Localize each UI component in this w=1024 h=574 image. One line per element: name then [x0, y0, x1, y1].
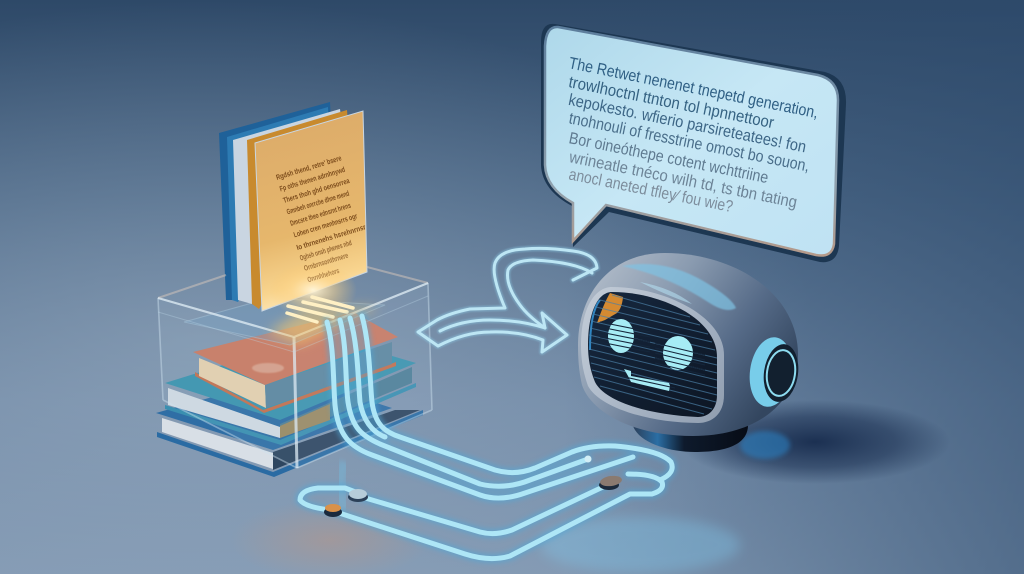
eye left — [608, 319, 634, 353]
bubble text: tnohnouli of fresstrine omost bo souon, — [567, 109, 811, 175]
robot shadow — [680, 400, 950, 484]
book stack — [156, 312, 423, 477]
glass box — [158, 267, 432, 468]
robot head — [578, 253, 798, 436]
page text: Lohen cren menhnsrrs ogr — [292, 211, 358, 239]
blue back cover — [219, 102, 332, 300]
page text: Ornbrnsonthrnere — [303, 251, 349, 273]
head highlight — [622, 264, 736, 310]
upright open book — [219, 102, 377, 318]
scan lines over face — [600, 322, 705, 388]
speech bubble — [541, 24, 846, 262]
scan lines — [589, 295, 717, 414]
orange page — [247, 110, 350, 309]
page text: Onrnhhehors — [306, 266, 340, 284]
bubble text: kepokesto. wfierio parsireteatees! fon — [567, 91, 808, 156]
cable end knob — [584, 456, 592, 462]
neon cables — [300, 316, 672, 559]
screen — [588, 292, 717, 417]
ear ring — [745, 334, 802, 410]
cable nodes — [324, 456, 623, 517]
cable floor reflection — [340, 462, 345, 510]
bubble depth — [541, 24, 846, 262]
robot base — [632, 418, 748, 452]
glass tray reflection — [184, 298, 385, 345]
bubble text: anocl aneted tfley∕ fou wie? — [567, 165, 734, 216]
bubble text: The Retwet nenenet tnepetd generation, — [567, 54, 820, 122]
page text: Rgdsh thend, retre' bsere — [275, 153, 343, 182]
side edges — [158, 283, 432, 468]
red book — [193, 312, 398, 413]
second blue cover — [227, 107, 330, 302]
silver node — [348, 489, 368, 502]
bubble text: Bor oineóthepe cotent wchttriine — [567, 129, 770, 187]
page glow — [269, 262, 357, 318]
teal book — [165, 335, 416, 445]
screen bezel — [581, 287, 724, 423]
front page — [255, 111, 367, 311]
white page block — [233, 109, 345, 304]
bubble text: trowlhoctnl ttnton tol hpnnettoor — [567, 73, 776, 132]
page text: Oghsh onsh phenes nhd — [299, 238, 353, 263]
page text: Fp oths thenen adrnhnywd — [278, 165, 346, 193]
robot floor glow — [740, 431, 790, 459]
page text: Io thrnenehs hsrehnrnsr — [295, 222, 367, 252]
bubble text: wrineatle tnéco wilh td, ts tbn tating — [567, 148, 799, 212]
mouth — [624, 369, 670, 391]
copper node — [599, 475, 623, 490]
bottom blue book — [156, 375, 423, 477]
orange reflection — [597, 293, 623, 323]
light slots under page — [268, 297, 380, 345]
orange node — [324, 504, 342, 517]
bright glass edges — [158, 283, 428, 337]
page text: Gmnbeh onrrche dhne mend — [285, 189, 351, 216]
bubble face — [545, 27, 838, 256]
left blue reflection — [590, 300, 600, 350]
curved double arrow — [418, 248, 597, 352]
page text: Dmcsre theo ednsrnt hrens — [289, 201, 352, 228]
bubble text — [546, 54, 822, 229]
page text: Thers thoh ghd oensorrea — [282, 176, 351, 205]
page text — [274, 153, 377, 285]
robot — [578, 253, 802, 452]
eye right — [663, 336, 693, 370]
